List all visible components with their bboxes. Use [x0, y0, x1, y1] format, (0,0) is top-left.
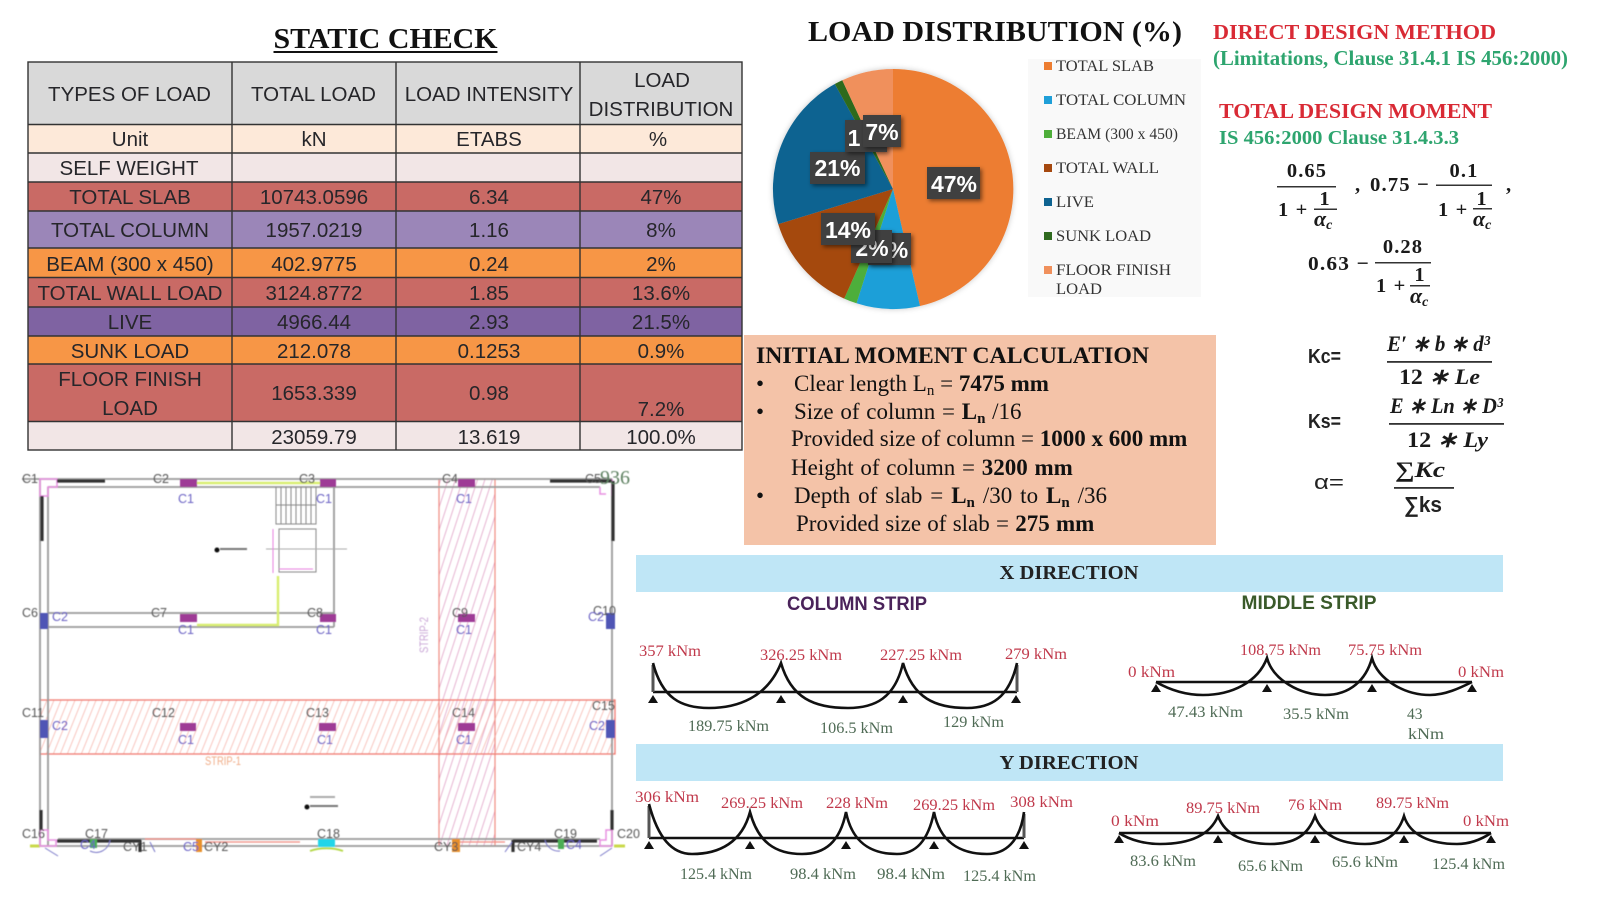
- table: static check loads: 2%: [646, 253, 676, 276]
- floor plan with design strips: C2: [589, 719, 605, 733]
- floor plan with design strips: C1: [178, 492, 194, 506]
- legend: FLOOR FINISH: [1056, 262, 1171, 279]
- formula: Kc: 12 ∗ Le: [1399, 364, 1480, 389]
- table: static check loads: 1.85: [469, 282, 509, 305]
- formula: moment distribution coefficients: 1: [1476, 188, 1488, 210]
- table: static check loads: 0.24: [469, 253, 509, 276]
- pie chart: load distribution: [773, 69, 1013, 309]
- heading: direct design method: [1213, 20, 1568, 70]
- formula: moment distribution coefficients: 0.1: [1450, 160, 1478, 182]
- moment diagram: x direction middle strip: 35.5 kNm: [1283, 706, 1349, 723]
- table: static check loads: ETABS: [456, 128, 522, 151]
- formula: moment distribution coefficients: c: [1422, 295, 1429, 310]
- table: static check loads: 100.0%: [626, 426, 696, 449]
- formula: moment distribution coefficients: α: [1473, 206, 1485, 231]
- formula: moment distribution coefficients: ,: [1355, 174, 1361, 196]
- pie label: 21%: [810, 152, 865, 184]
- pie label: overlapped 1%: [845, 120, 887, 152]
- heading: column strip: COLUMN STRIP: [787, 594, 927, 615]
- legend: SUNK LOAD: [1056, 228, 1151, 245]
- formula: alpha: ∑Kc: [1395, 457, 1445, 482]
- panel: initial moment calculation: [744, 335, 1216, 545]
- floor plan with design strips: C2: [52, 719, 68, 733]
- formula: alpha: ∑ks: [1404, 492, 1442, 517]
- table: static check loads: [28, 62, 742, 450]
- pie label: 14%: 14%: [825, 217, 871, 243]
- table: static check loads: 21.5%: [632, 311, 690, 334]
- table: static check loads: TYPES OF LOAD: [48, 83, 211, 106]
- floor plan with design strips: C2: [52, 610, 68, 624]
- formula: Ks: E ∗ Ln ∗ D³: [1389, 393, 1503, 418]
- moment diagram: x direction middle strip: 0 kNm: [1458, 664, 1504, 681]
- panel: initial moment calculation: /30 to: [975, 483, 1046, 508]
- formula: moment distribution coefficients: c: [1485, 218, 1492, 233]
- floor plan with design strips: C1: [22, 472, 38, 486]
- moment diagram: y direction middle strip: 83.6 kNm: [1130, 853, 1196, 870]
- moment diagram: x direction column strip: 357 kNm: [639, 643, 701, 660]
- pie label: 2%: [851, 230, 892, 263]
- table: static check loads: TOTAL SLAB: [69, 186, 191, 209]
- strip 1 hatched band: [40, 700, 615, 754]
- panel: initial moment calculation: L: [1046, 483, 1061, 508]
- moment diagram: y direction middle strip: 65.6 kNm: [1332, 854, 1398, 871]
- formula: alpha: α=: [1314, 472, 1344, 494]
- panel: initial moment calculation: •: [756, 399, 764, 424]
- pie label: 47%: 47%: [931, 171, 977, 197]
- table: static check loads: 6.34: [469, 186, 509, 209]
- table: static check loads: SUNK LOAD: [71, 340, 189, 363]
- formula: moment distribution coefficients: 1: [1414, 264, 1426, 286]
- floor plan with design strips: STRIP-1: [205, 754, 241, 768]
- moment diagram: x direction middle strip: 43: [1407, 706, 1423, 723]
- moment diagram: x direction column strip: 227.25 kNm: [880, 647, 962, 664]
- panel: initial moment calculation: =: [934, 371, 959, 396]
- floor plan with design strips: C1: [178, 623, 194, 637]
- moment diagram: y direction middle strip: [1111, 795, 1509, 875]
- moment diagram: y direction column strip: 125.4 kNm: [680, 866, 752, 883]
- formula: Kc: [1308, 331, 1492, 389]
- moment diagram: x direction column strip: 106.5 kNm: [820, 720, 893, 737]
- floor plan with design strips: CY3: [434, 840, 458, 854]
- table: static check loads: DISTRIBUTION: [589, 98, 733, 121]
- floor plan with design strips: C5: [183, 840, 199, 854]
- banner: y direction: [636, 744, 1503, 781]
- moment diagram: x direction middle strip: kNm: [1408, 726, 1444, 743]
- table: static check loads: Unit: [112, 128, 149, 151]
- panel: initial moment calculation: /16: [985, 399, 1022, 424]
- moment diagram: x direction column strip: 326.25 kNm: [760, 647, 842, 664]
- moment diagram: x direction column strip: 129 kNm: [943, 714, 1004, 731]
- heading: middle strip: MIDDLE STRIP: [1242, 593, 1377, 614]
- pie label: overlapped 1%: 1: [848, 125, 861, 151]
- table: static check loads: 8%: [646, 219, 676, 242]
- table: static check loads: TOTAL LOAD: [251, 83, 376, 106]
- panel: initial moment calculation: Clear length L: [794, 371, 927, 396]
- legend: BEAM (300 x 450): [1056, 126, 1178, 143]
- formula: moment distribution coefficients: 0.63 −: [1308, 253, 1370, 275]
- floor plan with design strips: C13: [306, 706, 329, 720]
- floor plan with design strips: C16: [22, 827, 45, 841]
- formula: Ks: [1308, 393, 1504, 452]
- table: static check loads: 1.16: [469, 219, 509, 242]
- legend: TOTAL SLAB: [1056, 58, 1154, 75]
- heading: direct design method: DIRECT DESIGN METHOD: [1213, 20, 1496, 44]
- table: static check loads: 13.6%: [632, 282, 690, 305]
- moment diagram: y direction middle strip: 0 kNm: [1111, 813, 1159, 830]
- formula: Kc: E′ ∗ b ∗ d³: [1386, 331, 1490, 356]
- heading: total design moment: TOTAL DESIGN MOMENT: [1219, 99, 1492, 123]
- floor plan with design strips: C9: [452, 606, 468, 620]
- heading: total design moment: [1219, 99, 1492, 149]
- legend: TOTAL COLUMN: [1056, 92, 1186, 109]
- floor plan with design strips: C3: [299, 472, 315, 486]
- floor plan with design strips: C19: [554, 827, 577, 841]
- table: static check loads: SELF WEIGHT: [60, 157, 199, 180]
- moment diagram: y direction column strip: 269.25 kNm: [913, 797, 995, 814]
- table: static check loads: LIVE: [108, 311, 152, 334]
- floor plan with design strips: C20: [617, 827, 640, 841]
- pie label: overlapped 8%: [868, 233, 911, 265]
- formula: moment distribution coefficients: 1 +: [1438, 199, 1468, 221]
- table: static check loads: LOAD INTENSITY: [405, 83, 574, 106]
- moment diagram: x direction middle strip: 108.75 kNm: [1240, 642, 1321, 659]
- formula: alpha: [1314, 457, 1454, 517]
- table: static check loads: BEAM (300 x 450): [46, 253, 214, 276]
- table: static check loads: 47%: [640, 186, 682, 209]
- table: static check loads: 0.9%: [638, 340, 684, 363]
- table: static check loads: LOAD: [102, 397, 158, 420]
- legend: LOAD: [1056, 281, 1102, 298]
- moment diagram: y direction column strip: 269.25 kNm: [721, 795, 803, 812]
- floor plan with design strips: C2: [588, 610, 604, 624]
- formula: Ks: 12 ∗ Ly: [1407, 427, 1488, 452]
- moment diagram: y direction middle strip: 76 kNm: [1288, 797, 1342, 814]
- table: static check loads: 212.078: [277, 340, 351, 363]
- panel: initial moment calculation: n: [977, 411, 986, 427]
- table: static check loads: TOTAL WALL LOAD: [38, 282, 222, 305]
- heading: direct design method: (Limitations, Clause 31.4.1 IS 456:2000): [1213, 46, 1568, 70]
- moment diagram: y direction column strip: 98.4 kNm: [877, 866, 945, 883]
- title: static check: STATIC CHECK: [274, 23, 498, 55]
- floor plan with design strips: CY4: [517, 840, 541, 854]
- floor plan with design strips: C14: [452, 706, 475, 720]
- pie label: 2%: 2%: [855, 235, 889, 261]
- table: static check loads: 13.619: [458, 426, 520, 449]
- floor plan with design strips: C1: [316, 492, 332, 506]
- table: static check loads: 2.93: [469, 311, 509, 334]
- table: static check loads: %: [649, 128, 667, 151]
- pie label: 14%: [821, 213, 875, 245]
- moment diagram: x direction column strip: 189.75 kNm: [688, 718, 769, 735]
- panel: initial moment calculation: Size of column = L: [794, 399, 977, 424]
- pie label: 7%: 7%: [865, 119, 899, 145]
- moment diagram: y direction middle strip: 0 kNm: [1463, 813, 1509, 830]
- table: static check loads: 0.98: [469, 382, 509, 405]
- formula: moment distribution coefficients: c: [1326, 218, 1333, 233]
- table: static check loads: 4966.44: [277, 311, 351, 334]
- formula: Ks: Ks=: [1308, 411, 1341, 433]
- floor plan with design strips: C1: [178, 733, 194, 747]
- moment diagram: x direction middle strip: 0 kNm: [1128, 664, 1175, 681]
- floor plan with design strips: C18: [317, 827, 340, 841]
- moment diagram: y direction middle strip: 89.75 kNm: [1186, 800, 1260, 817]
- panel: initial moment calculation: 7475 mm: [959, 371, 1049, 396]
- legend: LIVE: [1056, 194, 1094, 211]
- table: static check loads: LOAD: [634, 69, 690, 92]
- moment diagram: x direction column strip: 279 kNm: [1005, 646, 1067, 663]
- panel: initial moment calculation: /36: [1070, 483, 1107, 508]
- floor plan with design strips: [22, 467, 640, 856]
- moment diagram: y direction column strip: 98.4 kNm: [790, 866, 856, 883]
- moment diagram: y direction middle strip: 89.75 kNm: [1376, 795, 1449, 812]
- moment diagram: x direction middle strip: [1128, 642, 1504, 743]
- formula: moment distribution coefficients: α: [1410, 283, 1422, 308]
- floor plan with design strips: C1: [316, 623, 332, 637]
- formula: moment distribution coefficients: α: [1314, 206, 1326, 231]
- formula: moment distribution coefficients: [1277, 160, 1512, 310]
- floor plan with design strips: CY1: [123, 840, 147, 854]
- floor plan with design strips: C6: [22, 606, 38, 620]
- table: static check loads: 10743.0596: [260, 186, 368, 209]
- formula: moment distribution coefficients: ,: [1506, 174, 1512, 196]
- formula: moment distribution coefficients: 0.65: [1287, 160, 1327, 182]
- floor plan with design strips: C10: [593, 604, 616, 618]
- panel: initial moment calculation: Provided size of slab = 275 mm: [796, 511, 1094, 536]
- panel: initial moment calculation: Height of column = 3200 mm: [791, 455, 1073, 480]
- floor plan with design strips: C4: [80, 838, 96, 852]
- moment diagram: y direction column strip: 125.4 kNm: [963, 868, 1036, 885]
- moment diagram: x direction middle strip: 47.43 kNm: [1168, 704, 1243, 721]
- table: static check loads: 0.1253: [458, 340, 520, 363]
- formula: moment distribution coefficients: 1 +: [1278, 199, 1308, 221]
- panel: initial moment calculation: n: [967, 495, 976, 511]
- table: static check loads: 1653.339: [271, 382, 357, 405]
- moment diagram: y direction column strip: 308 kNm: [1010, 794, 1073, 811]
- panel: initial moment calculation: •: [756, 483, 764, 508]
- panel: initial moment calculation: Depth of slab = L: [794, 483, 967, 508]
- icon: level markers: [214, 548, 338, 810]
- floor plan with design strips: C1: [456, 492, 472, 506]
- panel: initial moment calculation: n: [1061, 495, 1070, 511]
- floor plan with design strips: C4: [566, 838, 582, 852]
- heading: total design moment: IS 456:2000 Clause 31.4.3.3: [1219, 127, 1459, 149]
- table: static check loads: kN: [301, 128, 327, 151]
- floor plan with design strips: STRIP-2: [417, 617, 431, 653]
- table: static check loads: 3124.8772: [266, 282, 362, 305]
- floor plan with design strips: C1: [317, 733, 333, 747]
- panel: initial moment calculation: •: [756, 371, 764, 396]
- moment diagram: y direction column strip: 306 kNm: [635, 789, 699, 806]
- floor plan with design strips: C15: [592, 699, 615, 713]
- moment diagram: y direction column strip: 228 kNm: [826, 795, 888, 812]
- table: static check loads: FLOOR FINISH: [58, 368, 202, 391]
- floor plan with design strips: C5: [585, 472, 601, 486]
- floor plan with design strips: C1: [456, 733, 472, 747]
- banner: x direction: X DIRECTION: [1000, 562, 1139, 584]
- moment diagram: y direction column strip: [635, 789, 1073, 885]
- floor plan with design strips: C17: [85, 827, 108, 841]
- table: static check loads: TOTAL COLUMN: [51, 219, 209, 242]
- formula: moment distribution coefficients: 0.28: [1383, 236, 1423, 258]
- moment diagram: x direction middle strip: 75.75 kNm: [1348, 642, 1422, 659]
- formula: Kc: Kc=: [1308, 346, 1341, 368]
- pie label: overlapped 8%: %: [888, 237, 908, 263]
- floor plan with design strips: C11: [22, 706, 44, 720]
- formula: moment distribution coefficients: 0.75 −: [1370, 174, 1430, 196]
- strip 2 hatched band: [439, 479, 495, 846]
- panel: initial moment calculation: Provided size of column = 1000 x 600 mm: [791, 426, 1187, 451]
- panel: initial moment calculation: n: [927, 383, 935, 399]
- floor plan with design strips: C8: [307, 606, 323, 620]
- title: load distribution: LOAD DISTRIBUTION (%): [808, 16, 1182, 48]
- table: static check loads: 7.2%: [638, 398, 684, 421]
- moment diagram: y direction middle strip: 125.4 kNm: [1432, 856, 1505, 873]
- banner: y direction: Y DIRECTION: [1000, 752, 1139, 774]
- icon: staircase and lift core: [266, 487, 347, 573]
- pie label: 21%: 21%: [814, 155, 861, 181]
- table: static check loads: 402.9775: [271, 253, 357, 276]
- floor plan with design strips: C12: [152, 706, 175, 720]
- legend: [1028, 58, 1201, 298]
- moment diagram: y direction middle strip: 65.6 kNm: [1238, 858, 1303, 875]
- table: static check loads: 23059.79: [271, 426, 357, 449]
- floor plan with design strips: C4: [442, 472, 458, 486]
- floor plan with design strips: CY2: [204, 840, 228, 854]
- floor plan with design strips: 936: [600, 467, 630, 489]
- formula: moment distribution coefficients: 1 +: [1376, 275, 1406, 297]
- formula: moment distribution coefficients: 1: [1319, 188, 1331, 210]
- floor plan with design strips: C7: [151, 606, 167, 620]
- table: static check loads: 1957.0219: [266, 219, 362, 242]
- moment diagram: x direction column strip: [639, 643, 1067, 737]
- floor plan with design strips: C2: [153, 472, 169, 486]
- legend: TOTAL WALL: [1056, 160, 1159, 177]
- floor plan with design strips: C1: [456, 623, 472, 637]
- banner: x direction: [636, 555, 1503, 592]
- panel: initial moment calculation: INITIAL MOMENT CALCULATION: [756, 343, 1149, 368]
